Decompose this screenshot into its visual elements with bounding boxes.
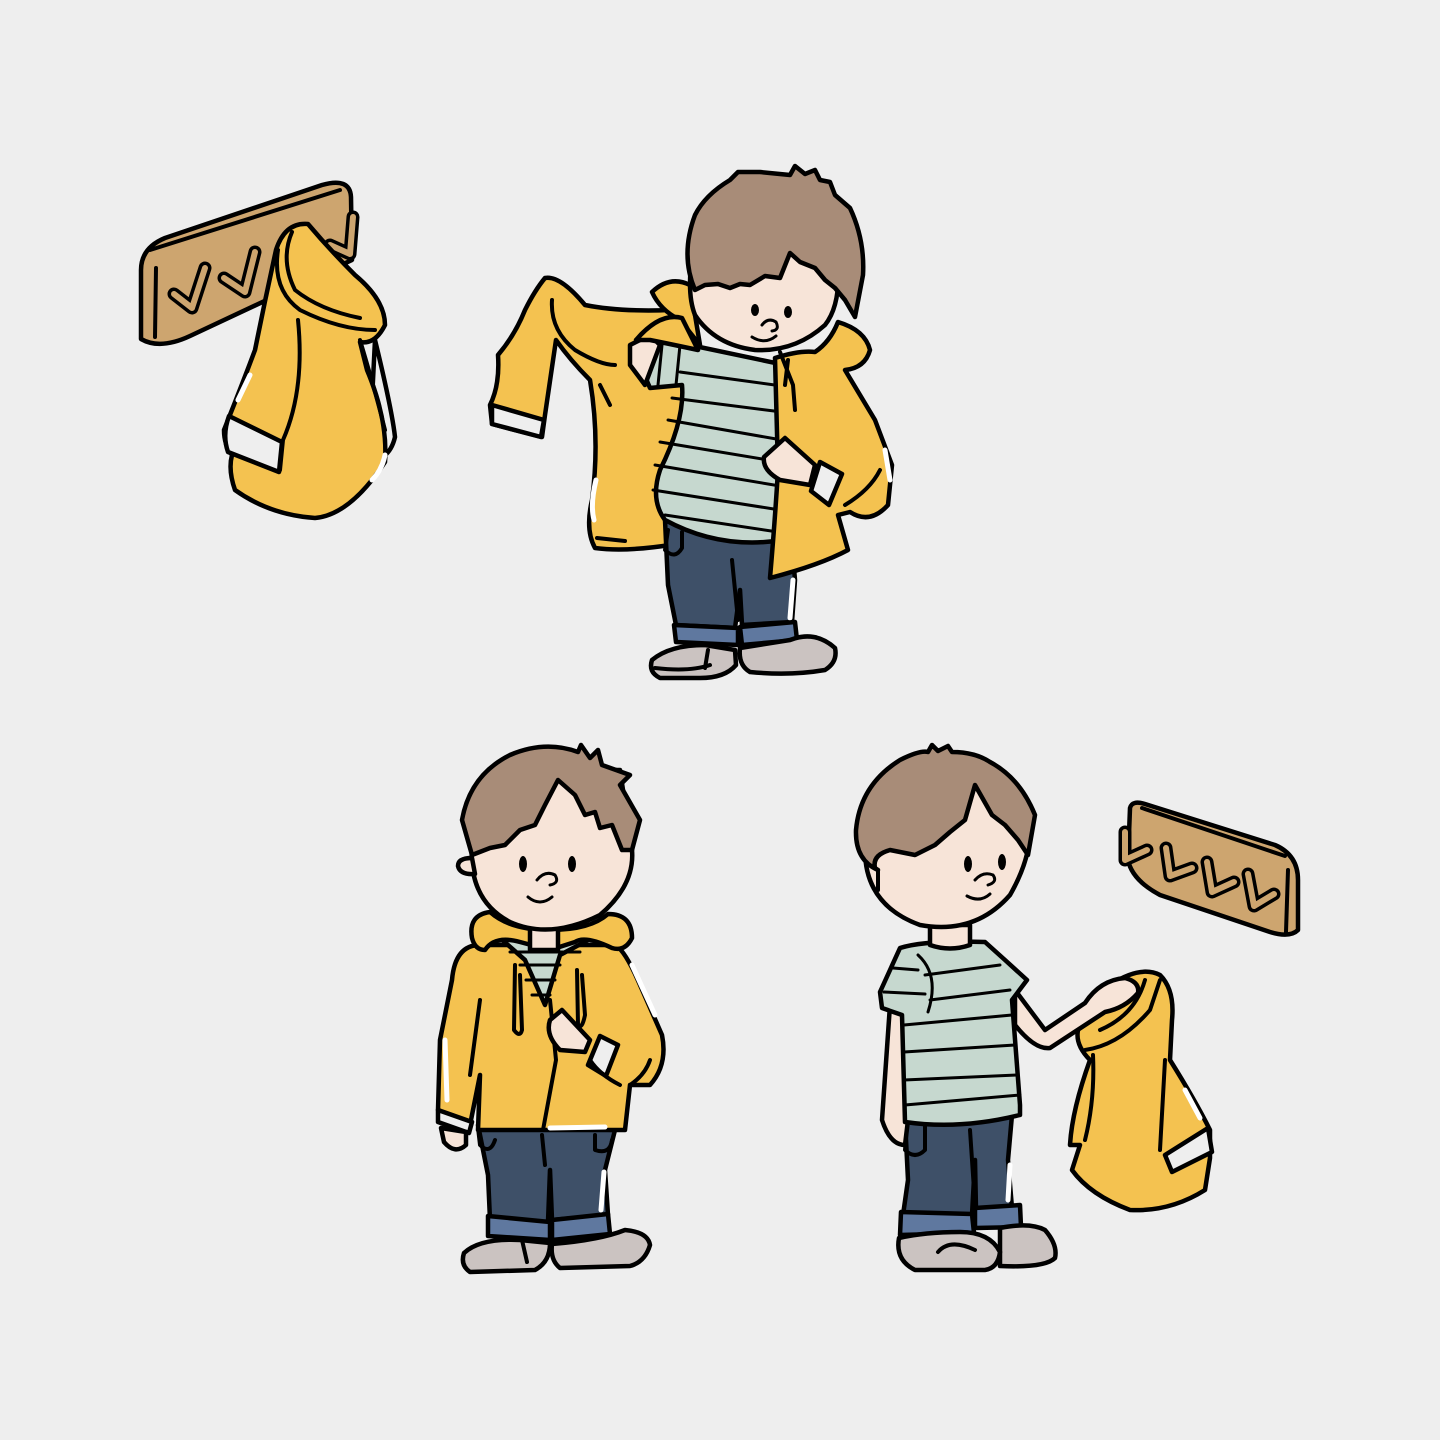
head with hair and face: [688, 166, 863, 350]
scene: boy hanging coat: [856, 745, 1298, 1270]
illustration: yellow raincoat on hook: [224, 224, 395, 518]
hood behind head and hand: [630, 281, 700, 385]
scene: boy putting on raincoat: [490, 166, 892, 678]
icon: wooden coat rack: [141, 183, 353, 344]
striped t-shirt: [640, 340, 785, 542]
striped t-shirt: [880, 942, 1027, 1125]
neck: [530, 925, 558, 950]
coat front on body: [764, 322, 892, 578]
hood: [471, 912, 632, 950]
left hand: [441, 1010, 590, 1149]
raincoat body: [438, 938, 664, 1133]
boy legs and jeans: [665, 520, 797, 645]
shoes: [651, 636, 836, 678]
scene: boy wearing raincoat: [438, 745, 664, 1272]
shoes: [463, 1230, 650, 1272]
arm reaching toward coat: [882, 978, 1138, 1145]
neck: [930, 925, 970, 948]
head with hair and face: [458, 745, 640, 930]
raincoat held up: [1070, 972, 1212, 1210]
jeans: [478, 1125, 615, 1240]
jeans: [900, 1115, 1021, 1235]
wall rack: [1125, 803, 1298, 935]
coat sleeve and back held out: [490, 278, 690, 549]
shoes: [898, 1225, 1056, 1270]
scene: coat hanging on wall rack: [141, 183, 395, 518]
head with hair and face: [856, 745, 1035, 927]
